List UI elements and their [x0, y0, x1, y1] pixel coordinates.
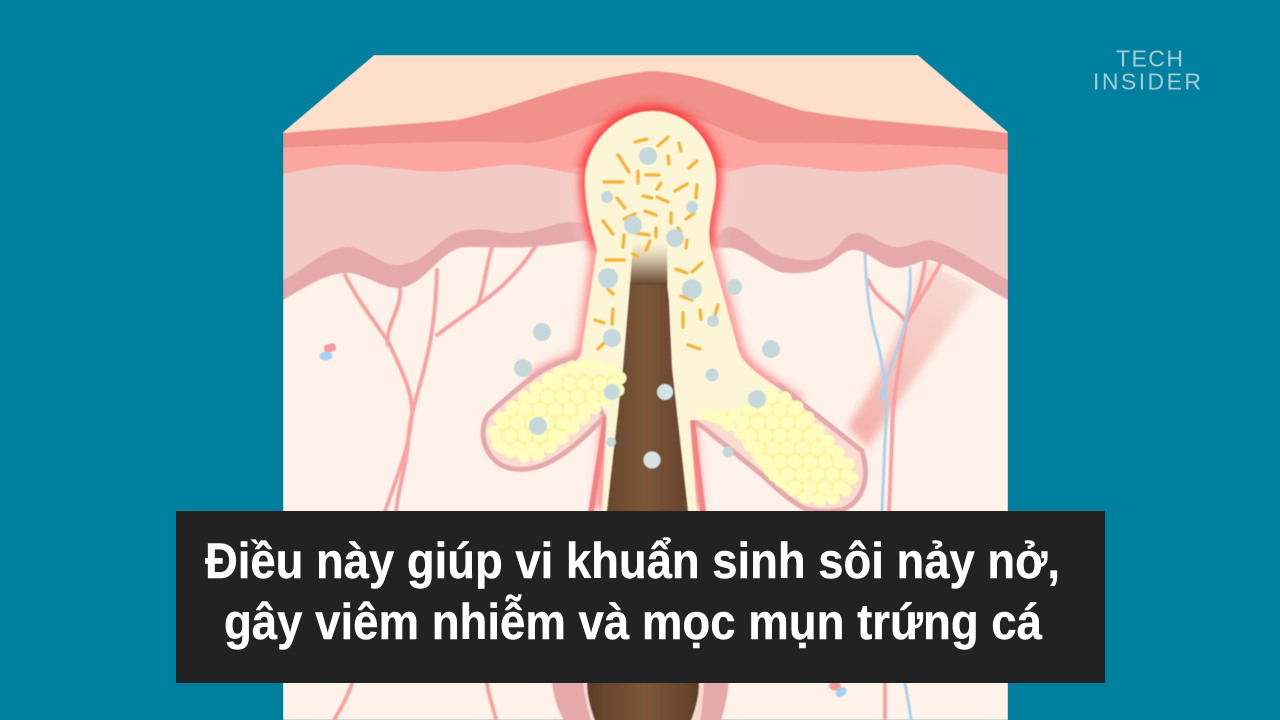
follicle wall lines — [591, 417, 703, 512]
dermal ridge band left — [283, 222, 590, 300]
dermal ridge band right — [713, 227, 1008, 300]
blood vessels left — [334, 247, 535, 720]
blood vessels right — [868, 262, 941, 720]
dermis below pink layer — [310, 240, 982, 286]
dermis — [283, 240, 1008, 720]
bacteria rods — [595, 137, 718, 349]
epidermis upper band — [283, 71, 1008, 150]
caption box — [176, 511, 1105, 683]
inflammation red glow around bulb — [585, 111, 716, 250]
caption line 2: gây viêm nhiễm và mọc mụn trứng cá — [224, 594, 1042, 650]
follicle bottom — [552, 680, 729, 720]
sebaceous lobes outline — [483, 358, 865, 511]
inflammation red glow around neck and lobes — [530, 250, 800, 510]
epidermis salmon band — [283, 117, 1008, 175]
Tech Insider logo: INSIDER — [1093, 68, 1201, 94]
acne infographic canvas — [176, 50, 1200, 720]
sebaceous gland cells right — [702, 388, 858, 506]
red and blue blood cells — [320, 343, 848, 699]
pink skin layer — [283, 165, 1008, 285]
Tech Insider logo — [1093, 46, 1201, 94]
skin cross-section diagram — [283, 55, 1008, 720]
inflammation pale halo — [570, 168, 868, 450]
muscle band — [846, 262, 978, 450]
dead skin cells — [514, 147, 780, 468]
hair shaft — [587, 243, 699, 720]
Tech Insider logo: TECH — [1116, 46, 1183, 72]
pimple sebum body — [575, 110, 779, 511]
caption line 1: Điều này giúp vi khuẩn sinh sôi nảy nở, — [205, 533, 1060, 589]
skin surface — [283, 55, 1008, 176]
sebaceous gland cells left — [486, 358, 626, 462]
